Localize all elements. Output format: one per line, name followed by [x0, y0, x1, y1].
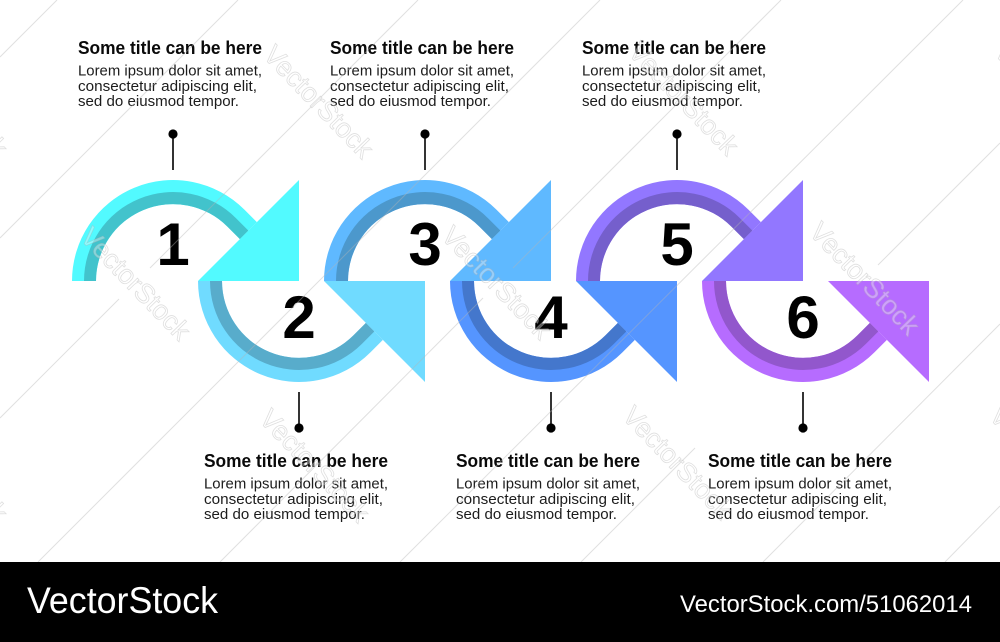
text block 4: Lorem ipsum dolor sit amet,: [456, 476, 640, 492]
text block 3: [330, 38, 514, 110]
arrow 5: violet: [576, 180, 803, 281]
text block 6: [708, 451, 892, 523]
text block 5: consectetur adipiscing elit,: [582, 79, 761, 95]
text block 2: Lorem ipsum dolor sit amet,: [204, 476, 388, 492]
arrow 2: sky blue: [198, 281, 425, 382]
text block 6: sed do eiusmod tempor.: [708, 507, 869, 523]
number 1: 1: [156, 211, 190, 278]
text block 2: [204, 451, 388, 523]
watermark text: VectorStock: [254, 404, 376, 528]
watermark text: VectorStock: [623, 37, 745, 161]
pin 1: [168, 129, 178, 170]
pin 2: [294, 392, 304, 433]
arrow 3: blue: [324, 180, 551, 281]
number 6: 6: [786, 284, 820, 351]
text block 5: Lorem ipsum dolor sit amet,: [582, 64, 766, 80]
text block 6: Some title can be here: [708, 451, 892, 471]
number 4: 4: [534, 284, 568, 351]
text block 1: Lorem ipsum dolor sit amet,: [78, 64, 262, 80]
arrow 4: royal blue: [450, 281, 677, 382]
text block 1: consectetur adipiscing elit,: [78, 79, 257, 95]
arrow 1: cyan: [72, 180, 299, 281]
text block 3: Some title can be here: [330, 38, 514, 58]
number 5: 5: [660, 211, 694, 278]
text block 4: [456, 451, 640, 523]
text block 6: consectetur adipiscing elit,: [708, 492, 887, 508]
footer bar: [0, 562, 1000, 642]
text block 6: Lorem ipsum dolor sit amet,: [708, 476, 892, 492]
text block 4: consectetur adipiscing elit,: [456, 492, 635, 508]
text block 2: sed do eiusmod tempor.: [204, 507, 365, 523]
pin 4: [546, 392, 556, 433]
watermark text: VectorStock: [804, 217, 926, 341]
number 3: 3: [408, 211, 442, 278]
watermark text: VectorStock: [436, 221, 558, 345]
text block 1: Some title can be here: [78, 38, 262, 58]
text block 4: sed do eiusmod tempor.: [456, 507, 617, 523]
pin 5: [672, 129, 682, 170]
arrow 6: purple: [702, 281, 929, 382]
watermark text: [0, 37, 1000, 528]
text block 2: Some title can be here: [204, 451, 388, 471]
text block 1: sed do eiusmod tempor.: [78, 94, 239, 110]
watermark text: VectorStock: [258, 40, 380, 164]
watermark text: VectorStock: [75, 222, 197, 346]
text block 3: consectetur adipiscing elit,: [330, 79, 509, 95]
text block 2: consectetur adipiscing elit,: [204, 492, 383, 508]
pin 3: [420, 129, 430, 170]
text block 3: Lorem ipsum dolor sit amet,: [330, 64, 514, 80]
text block 4: Some title can be here: [456, 451, 640, 471]
pin 6: [798, 392, 808, 433]
text block 5: Some title can be here: [582, 38, 766, 58]
text block 5: sed do eiusmod tempor.: [582, 94, 743, 110]
footer image id: VectorStock.com/51062014: [680, 591, 972, 618]
watermark text: VectorStock: [617, 401, 739, 525]
number 2: 2: [282, 284, 316, 351]
text block 3: sed do eiusmod tempor.: [330, 94, 491, 110]
text block 5: [582, 38, 766, 110]
text block 1: [78, 38, 262, 110]
footer logo text: VectorStock: [27, 580, 218, 621]
